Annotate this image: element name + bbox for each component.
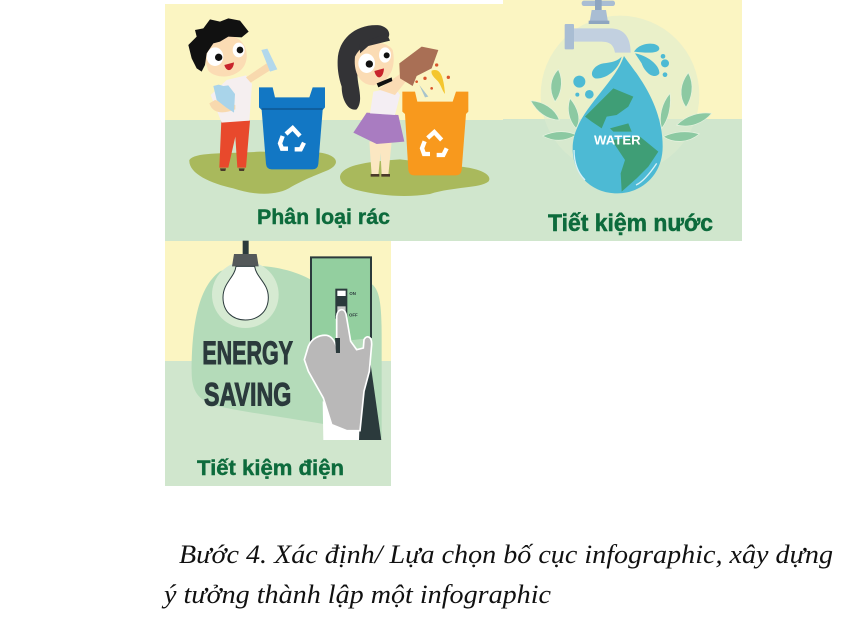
icon: orange recycling bin xyxy=(402,92,468,175)
icon: cuff xyxy=(323,401,360,440)
icon: water drop globe xyxy=(573,56,663,193)
icon: hand xyxy=(304,310,372,431)
label: energy saving: ENERGY xyxy=(202,335,293,371)
illustration: falling waste xyxy=(415,63,450,97)
continents xyxy=(585,88,658,192)
panel: energy saving: SAVING xyxy=(204,377,291,413)
green backdrop xyxy=(192,266,382,438)
text block: step 4 description: Bước 4. Xác định/ Lựa chọn bố cục infographic, xây dựng xyxy=(179,539,833,569)
icon: wall switch: OFF xyxy=(349,313,358,318)
panel: water saving xyxy=(503,0,742,241)
icon: wall switch xyxy=(311,257,371,345)
icon: leaves xyxy=(531,69,712,141)
illustration: girl with box xyxy=(338,25,438,177)
panel: waste sorting xyxy=(165,4,505,241)
water label: WATER xyxy=(594,132,641,147)
glow circle xyxy=(541,16,699,174)
icon: water splashes xyxy=(573,44,669,99)
icon: faucet xyxy=(565,0,631,53)
icon: blue recycling bin xyxy=(259,87,325,169)
grass patch left xyxy=(189,152,336,194)
illustration: boy with bottles xyxy=(188,18,277,171)
heading: waste sorting: Phân loại rác xyxy=(257,206,390,229)
panel: energy saving xyxy=(165,241,391,486)
text block: step 4 description: ý tưởng thành lập một infographic xyxy=(161,579,551,609)
icon: wall switch: ON xyxy=(349,291,356,296)
text block: step 4 description xyxy=(161,539,833,609)
heading: water saving: Tiết kiệm nước xyxy=(548,210,713,237)
icon: light bulb xyxy=(212,241,279,328)
grass patch right xyxy=(340,159,489,196)
heading: energy saving: Tiết kiệm điện xyxy=(197,457,344,480)
